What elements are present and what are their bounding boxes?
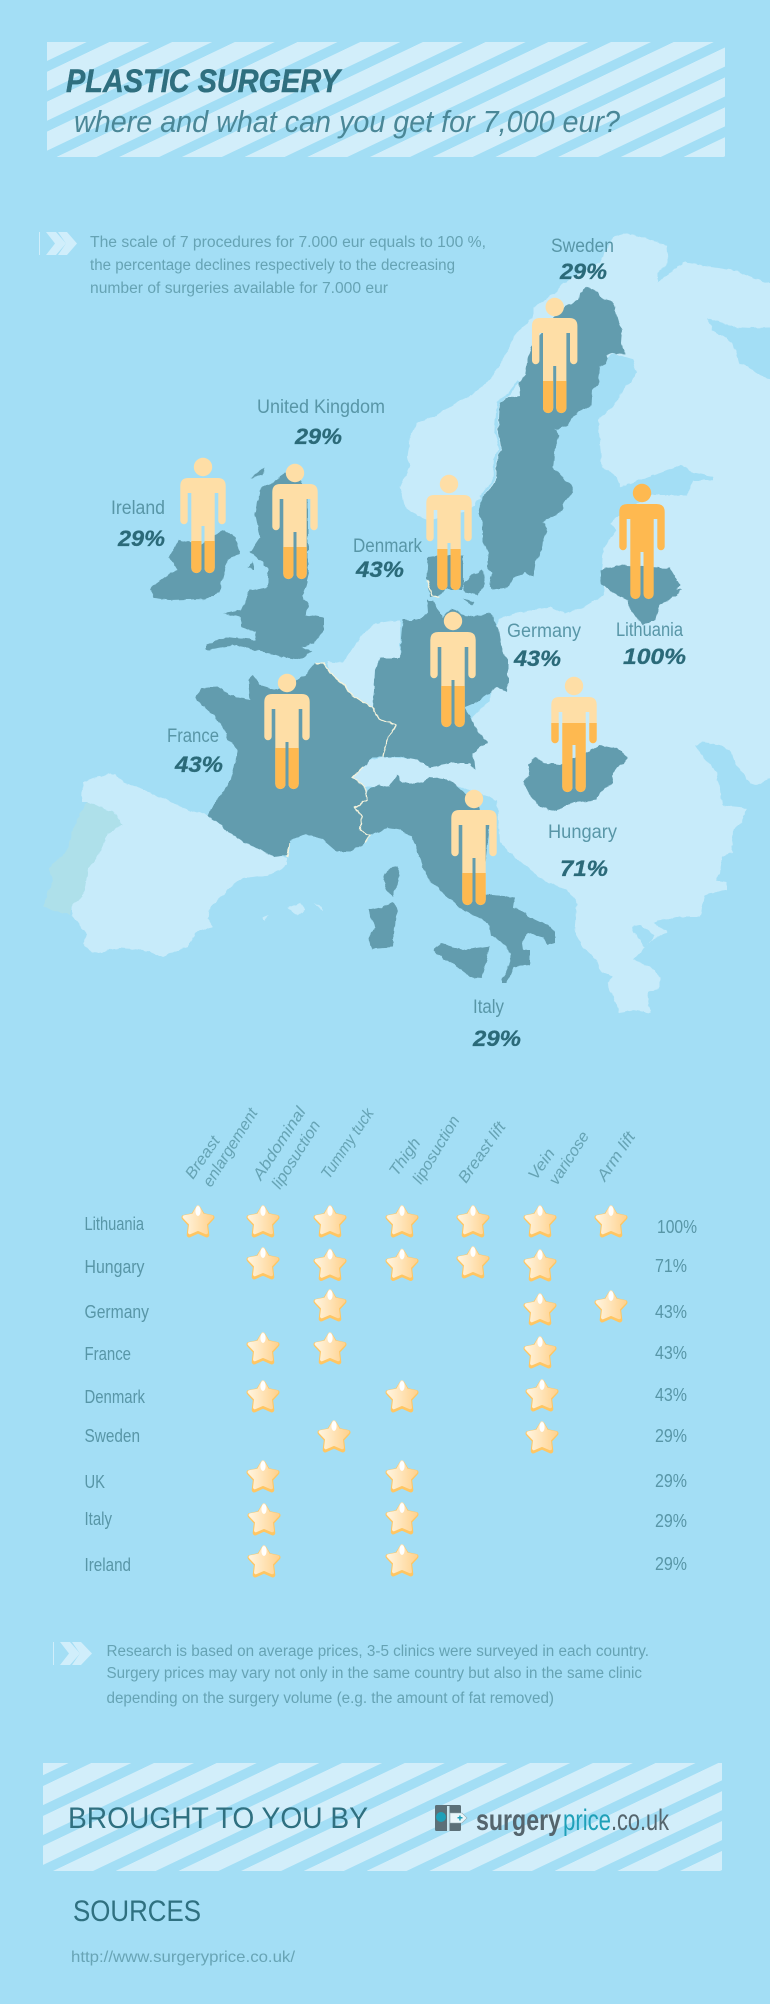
- water: inland lake and inlets: [632, 318, 770, 948]
- source link: http://www.surgeryprice.co.uk/: [71, 1949, 296, 1966]
- figure: Italy: [451, 790, 497, 905]
- figure: Ireland: [180, 458, 226, 573]
- country: Italy: [355, 775, 555, 983]
- row: Lithuania: 100%: [657, 1217, 697, 1237]
- figure: Germany: [430, 612, 476, 727]
- column headings: varicose: [546, 1129, 593, 1188]
- intro note: [39, 232, 490, 297]
- country: Germany: [373, 600, 508, 770]
- label: Ireland: 29%: [117, 526, 165, 551]
- label: Lithuania: Lithuania: [616, 620, 683, 641]
- sources heading: SOURCES: [73, 1895, 201, 1928]
- row: Italy: Italy: [84, 1509, 112, 1529]
- label: France: 43%: [174, 752, 223, 777]
- column headings: Tummy tuck: [318, 1105, 378, 1182]
- row: Germany: [84, 1290, 687, 1323]
- row: Sweden: 29%: [655, 1426, 687, 1446]
- country: Corsica: [383, 867, 399, 897]
- column headings: enlargement: [200, 1105, 262, 1190]
- row: Lithuania: [84, 1206, 697, 1237]
- row: Denmark: Denmark: [84, 1387, 146, 1407]
- country: Ireland: [150, 530, 240, 600]
- figure: France: [264, 674, 310, 789]
- row: Italy: [84, 1503, 687, 1533]
- row: Germany: Germany: [84, 1302, 149, 1322]
- figure: Sweden: [532, 298, 577, 413]
- note text: Research is based on average prices, 3-5 clinics were surveyed in each country.: [106, 1643, 649, 1660]
- icon: price tag: [435, 1805, 467, 1831]
- label: Hungary: 71%: [560, 856, 608, 881]
- column headings: Breast: [182, 1133, 224, 1182]
- country: Sardinia: [368, 902, 398, 950]
- note text: Surgery prices may vary not only in the same country but also in the same clinic: [106, 1665, 642, 1682]
- intro text: The scale of 7 procedures for 7.000 eur equals to 100 %,: [90, 234, 486, 251]
- row: Sweden: Sweden: [84, 1426, 140, 1446]
- column headings: Thigh: [386, 1135, 424, 1179]
- figure: United Kingdom: [272, 464, 318, 579]
- country: France: [195, 663, 397, 857]
- country: Hungary: [523, 745, 628, 811]
- label: Lithuania: [616, 620, 686, 669]
- row: Denmark: 43%: [655, 1385, 687, 1405]
- land: Spain: [72, 773, 287, 957]
- row: UK: UK: [84, 1472, 105, 1492]
- label: Sweden: [551, 236, 614, 284]
- label: France: France: [167, 726, 219, 747]
- row: Ireland: [84, 1545, 687, 1575]
- row: Ireland: 29%: [655, 1554, 687, 1574]
- row: Hungary: 71%: [655, 1256, 687, 1276]
- brought to you by banner: [43, 1763, 722, 1871]
- borders: [287, 580, 440, 857]
- label: Lithuania: 100%: [623, 644, 686, 669]
- label: United Kingdom: [257, 397, 385, 449]
- logo text: surgery: [476, 1804, 561, 1837]
- logo text: price: [563, 1804, 611, 1837]
- row: France: France: [84, 1344, 131, 1364]
- row: UK: 29%: [655, 1471, 687, 1491]
- banner heading: BROUGHT TO YOU BY: [68, 1802, 368, 1835]
- map of Europe: [43, 233, 770, 1013]
- column headings: liposuction: [410, 1113, 464, 1187]
- intro text: number of surgeries available for 7.000 eur: [90, 280, 388, 297]
- procedures table: [84, 1104, 697, 1575]
- row: France: [84, 1333, 687, 1366]
- label: United Kingdom: 29%: [294, 424, 342, 449]
- column headings: [182, 1104, 639, 1192]
- row: France: 43%: [655, 1343, 687, 1363]
- country: Sweden: [479, 287, 625, 590]
- label: Sweden: 29%: [559, 259, 607, 284]
- label: Italy: 29%: [472, 1026, 521, 1051]
- title banner: [47, 42, 725, 157]
- label: Sweden: Sweden: [551, 236, 614, 257]
- logo: surgeryprice.co.uk: [435, 1804, 670, 1837]
- icon: chevrons: [39, 232, 77, 255]
- row: Ireland: Ireland: [84, 1555, 131, 1575]
- row: Germany: 43%: [655, 1302, 687, 1322]
- figure: Lithuania: [619, 484, 665, 599]
- research note: [53, 1642, 653, 1707]
- land: Scandinavia, Finland and eastern Europe: [353, 233, 770, 1013]
- label: Germany: Germany: [507, 621, 581, 642]
- label: Ireland: Ireland: [111, 498, 165, 519]
- water strip: west of Sweden: [480, 381, 519, 497]
- country: Lithuania: [600, 565, 682, 625]
- figure: Hungary: [551, 677, 597, 792]
- label: France: [167, 726, 223, 777]
- country: United Kingdom: [206, 467, 324, 660]
- label: Germany: [507, 621, 581, 671]
- figure: Denmark: [426, 475, 472, 590]
- land: Portugal: [43, 802, 123, 915]
- row: UK: [84, 1461, 687, 1492]
- column headings: Breast lift: [455, 1119, 510, 1186]
- label: Hungary: [548, 822, 617, 881]
- row: Lithuania: Lithuania: [84, 1214, 145, 1234]
- label: Germany: 43%: [513, 646, 561, 671]
- label: Hungary: Hungary: [548, 822, 617, 843]
- country: Denmark: [427, 555, 485, 605]
- label: Italy: Italy: [473, 997, 504, 1018]
- title: PLASTIC SURGERY: [66, 63, 342, 99]
- label: Denmark: [353, 536, 422, 582]
- intro text: the percentage declines respectively to the decreasing: [90, 257, 455, 274]
- logo text: .co.uk: [611, 1804, 670, 1837]
- label: United Kingdom: United Kingdom: [257, 397, 385, 418]
- column headings: Abdominal: [249, 1104, 310, 1184]
- country: Sicily: [433, 943, 490, 978]
- subtitle: where and what can you get for 7,000 eur?: [74, 104, 621, 139]
- column headings: liposuction: [269, 1118, 324, 1192]
- icon: chevrons: [53, 1642, 92, 1665]
- land: Balearic islands: [262, 903, 322, 921]
- row: Hungary: Hungary: [84, 1257, 144, 1277]
- label: Ireland: [111, 498, 165, 551]
- column headings: Arm lift: [594, 1129, 639, 1185]
- row: Denmark: [84, 1380, 687, 1410]
- row: Sweden: [84, 1421, 687, 1451]
- land: Benelux: [327, 620, 400, 707]
- row: Hungary: [84, 1247, 687, 1279]
- label: Denmark: Denmark: [353, 536, 422, 557]
- note text: depending on the surgery volume (e.g. the amount of fat removed): [106, 1690, 554, 1707]
- row: Italy: 29%: [655, 1511, 687, 1531]
- label: Italy: [472, 997, 521, 1051]
- label: Denmark: 43%: [355, 557, 404, 582]
- column headings: Vein: [525, 1146, 559, 1183]
